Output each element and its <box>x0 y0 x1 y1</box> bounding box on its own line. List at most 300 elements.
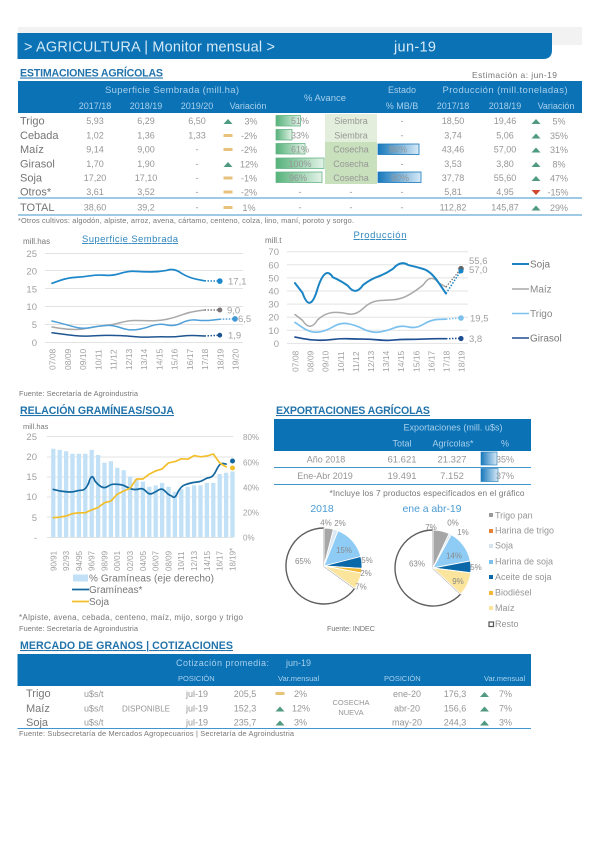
row: Maíz: - <box>196 144 198 154</box>
value labels: 3,8 <box>469 334 482 345</box>
table header: % Avance <box>304 93 346 104</box>
row: Soja: Soja <box>20 172 43 184</box>
row: Soja: - <box>196 173 198 183</box>
x axis labels: 18/19* <box>228 548 237 571</box>
x axis labels <box>50 548 237 571</box>
row: Otros: -2% <box>241 188 257 198</box>
right axis labels <box>243 433 259 542</box>
row: Soja: 244,3 <box>444 718 466 728</box>
table header: 2018/19 <box>489 101 521 111</box>
chart: superficie sembrada: mill.has <box>23 237 50 246</box>
value labels: 57,0 <box>469 265 488 276</box>
row: Trigo: 3% <box>244 116 258 126</box>
row: Maíz: 9,00 <box>137 144 155 154</box>
y axis labels: 60 <box>268 260 279 272</box>
x axis labels: 18/19 <box>215 348 225 370</box>
value labels: 1,9 <box>228 330 241 342</box>
row: Trigo: u$s/t <box>84 689 104 699</box>
x axis labels: 19/20 <box>230 348 240 370</box>
legend: producción <box>512 260 562 344</box>
x axis labels: 10/11 <box>93 349 103 370</box>
y axis labels: 20 <box>268 312 279 324</box>
heading: relación gramíneas/soja: RELACIÓN GRAMÍNEAS/SOJA <box>20 404 174 417</box>
right axis labels: 40% <box>243 484 259 492</box>
x axis labels: 04/05 <box>139 550 148 571</box>
pie chart: 2018: 5% <box>361 556 373 565</box>
x axis labels <box>290 350 466 372</box>
panel: estimaciones table <box>18 81 582 215</box>
legend: pies: Harina de trigo <box>495 526 554 536</box>
table header: % MB/B <box>386 101 418 111</box>
value labels <box>227 276 251 342</box>
row: TOTAL: 1% <box>242 203 256 213</box>
heading: exportaciones agrícolas: EXPORTACIONES AGRÍCOLAS <box>276 404 430 417</box>
heading: estimaciones agrícolas: ESTIMACIONES AGRÍCOLAS <box>20 66 163 80</box>
row: TOTAL: 29% <box>550 203 568 213</box>
row: Trigo: Siembra <box>334 116 368 126</box>
series: maíz <box>52 308 222 330</box>
value labels <box>469 256 488 345</box>
row: TOTAL: - <box>196 202 198 212</box>
row: Maíz: 43,46 <box>442 144 464 154</box>
row: Maíz: 9,14 <box>86 144 104 154</box>
table header: POSICIÓN <box>178 674 215 683</box>
pie chart: ene a abr-19: 14% <box>446 552 462 560</box>
right axis labels: 60% <box>243 458 259 468</box>
row: TOTAL: 38,60 <box>84 202 106 212</box>
x axis labels: 11/12 <box>108 349 118 370</box>
series: gramíneas <box>53 458 235 497</box>
row: TOTAL: 39,2 <box>137 202 155 212</box>
chart: relación gramíneas soja <box>23 422 259 608</box>
row: Otros: 5,81 <box>444 187 462 197</box>
row: TOTAL <box>20 202 568 214</box>
row: Girasol: 1,70 <box>86 159 104 169</box>
chart legend: Gramíneas* <box>89 585 142 596</box>
panel: exportaciones table: 37% <box>496 471 514 481</box>
value labels: 9,0 <box>227 306 240 316</box>
y axis labels: 20 <box>26 266 37 278</box>
row: Girasol: 3,80 <box>496 159 514 169</box>
row: Soja: Cosecha <box>333 173 369 183</box>
value labels: 19,5 <box>470 314 488 324</box>
row: Soja: u$s/t <box>84 718 104 728</box>
row: Girasol: 12% <box>240 160 258 170</box>
x axis labels: 17/18 <box>442 350 452 372</box>
x axis labels: 15/16 <box>411 350 421 372</box>
row: Maíz: 57,00 <box>494 144 516 154</box>
estimation date: Estimación a: jun-19 <box>472 70 557 80</box>
x axis labels: 12/13 <box>124 348 134 370</box>
chart title: Superficie Sembrada <box>82 234 179 245</box>
row: Girasol: 1,90 <box>137 159 155 169</box>
series: maíz <box>295 266 464 326</box>
series: girasol <box>52 333 222 338</box>
x axis labels: 09/10 <box>78 348 88 370</box>
panel: exportaciones table: 61.621 <box>387 454 417 466</box>
row: Maíz: 31% <box>550 145 568 155</box>
row: Otros: 3,61 <box>86 187 104 197</box>
x axis labels: 08/09 <box>306 350 316 372</box>
legend: producción: Girasol <box>530 334 562 344</box>
y axis labels <box>268 247 279 350</box>
x axis labels: 08/09 <box>164 550 173 571</box>
label: cosecha nueva: COSECHA <box>332 698 370 707</box>
source: mercado: Fuente: Subsecretaría de Mercados Agropecuarios | Secretaría de Agroindustria <box>19 729 295 738</box>
row: Soja: 96% <box>289 173 307 183</box>
row: Girasol: 100% <box>288 159 312 169</box>
x axis labels: 00/01 <box>113 550 122 571</box>
right axis labels: 20% <box>243 508 259 518</box>
source: indec: Fuente: INDEC <box>327 624 376 633</box>
footnote: otros cultivos: *Otros cultivos: algodón, alpiste, arroz, avena, cártamo, centeno, colza, lino, maní, poroto y sorgo. <box>18 216 354 225</box>
legend: pies: Trigo pan <box>495 510 533 520</box>
x axis labels: 98/99 <box>100 550 109 571</box>
row: Trigo: 205,5 <box>234 689 256 699</box>
row: Soja <box>20 172 568 184</box>
y axis labels: 5 <box>32 320 37 331</box>
title: pie 2018: 2018 <box>310 503 334 515</box>
row: Maíz: 86% <box>389 144 407 154</box>
row: Maíz: -2% <box>241 145 257 155</box>
heading: mercado de granos: MERCADO DE GRANOS | COTIZACIONES <box>20 640 233 652</box>
row: Soja: 47% <box>550 174 568 184</box>
table header: 2019/20 <box>181 101 213 111</box>
pie chart: ene a abr-19: 0% <box>447 518 459 528</box>
row: Maíz: Maíz <box>20 144 44 156</box>
left axis labels: 20 <box>26 452 37 463</box>
x axis labels: 02/03 <box>126 550 135 571</box>
x axis labels: 96/97 <box>88 550 97 571</box>
x axis labels: 07/08 <box>48 348 58 370</box>
title: pie ene a abr-19: ene a abr-19 <box>402 503 462 515</box>
row: Soja: -1% <box>241 174 257 184</box>
row: Trigo: 6,29 <box>137 116 155 126</box>
source: superficie: Fuente: Secretaría de Agroindustria <box>19 389 139 398</box>
label: cosecha nueva: NUEVA <box>338 708 364 717</box>
row: TOTAL: - <box>400 202 404 212</box>
y axis labels: 15 <box>26 284 37 296</box>
row: Cebada: 1,02 <box>86 130 104 140</box>
row: Cebada: Cebada <box>20 130 59 142</box>
series: soja <box>53 454 235 518</box>
left axis labels <box>26 432 37 544</box>
pie chart: ene a abr-19: 9% <box>452 577 464 586</box>
x axis labels: 14/15 <box>396 350 406 372</box>
estado bars <box>378 144 421 182</box>
y axis labels: 10 <box>26 302 37 313</box>
row: Maíz: Maíz <box>26 703 50 715</box>
row: Maíz: u$s/t <box>84 704 104 714</box>
pie chart: 2018: 2% <box>360 569 372 578</box>
chart: producción <box>265 230 488 372</box>
x axis labels: 12/13 <box>366 350 376 372</box>
panel: exportaciones table: % <box>501 438 509 448</box>
x axis labels: 18/19 <box>456 350 466 372</box>
row: Soja: 235,7 <box>234 718 256 728</box>
pie chart: ene a abr-19: 63% <box>409 560 425 568</box>
table header: Cotización promedia: <box>176 658 269 668</box>
row: Cebada: 35% <box>550 131 568 141</box>
row: Soja: 55,60 <box>494 173 516 183</box>
header banner <box>18 27 582 59</box>
row: Cebada: - <box>400 130 404 140</box>
row: TOTAL: 145,87 <box>491 202 519 212</box>
table header: Superficie Sembrada (mill.ha) <box>105 85 239 96</box>
row: Soja: 17,10 <box>135 173 157 183</box>
legend: producción: Soja <box>530 260 550 270</box>
table header: Variación <box>230 101 266 111</box>
row: Maíz: 152,3 <box>234 704 256 714</box>
row: Maíz: 12% <box>292 704 310 714</box>
series: trigo <box>52 316 238 330</box>
legend: pies: Resto <box>495 619 519 629</box>
row: Trigo <box>20 116 566 128</box>
chart title: Producción <box>354 230 406 241</box>
chart: superficie sembrada <box>23 234 251 370</box>
table header: Variación <box>538 101 574 111</box>
row: TOTAL: 112,82 <box>440 202 466 212</box>
table header: Producción (mill.toneladas) <box>442 85 568 96</box>
row: TOTAL: - <box>298 202 302 212</box>
x axis labels: 14/15 <box>203 550 212 571</box>
pie chart: 2018: 4% <box>320 518 332 528</box>
x axis labels: 94/95 <box>75 550 84 571</box>
table header: 2017/18 <box>437 101 469 111</box>
pie chart: 2018: 65% <box>295 557 311 566</box>
row: Cebada: -2% <box>241 131 257 141</box>
table header <box>18 81 582 113</box>
row: Soja: 3% <box>499 718 512 728</box>
pie chart: 2018 <box>286 518 373 604</box>
row: Girasol: - <box>400 159 404 169</box>
table header: Estado <box>388 85 416 95</box>
row: Cebada: 1,33 <box>188 130 206 140</box>
row: Soja <box>26 717 512 729</box>
row: Girasol: - <box>196 159 198 169</box>
table header: Var.mensual <box>278 674 319 683</box>
row: Otros: - <box>298 187 302 197</box>
right axis labels: 80% <box>243 433 259 442</box>
y axis labels: 40 <box>268 286 279 298</box>
right axis labels: 0% <box>243 534 255 542</box>
avance bars <box>276 116 324 182</box>
row: Otros: - <box>196 187 198 197</box>
row: Girasol: 3,53 <box>444 159 462 169</box>
panel: exportaciones table: 35% <box>496 454 514 464</box>
row: Soja: Soja <box>26 717 49 729</box>
panel: exportaciones table: 19.491 <box>387 471 417 482</box>
row: Cebada: 33% <box>291 130 309 140</box>
panel: exportaciones table <box>274 419 531 484</box>
chart legend: Soja <box>89 597 109 608</box>
table header: Var.mensual <box>484 674 525 683</box>
row: Maíz: 156,6 <box>444 704 466 714</box>
table header: POSICIÓN <box>384 674 421 683</box>
row: Girasol: 8% <box>552 160 566 170</box>
table header <box>18 654 531 686</box>
x axis labels: 90/91 <box>50 550 58 571</box>
left axis labels: 10 <box>26 492 37 503</box>
label: cosecha nueva <box>332 698 370 717</box>
chart: relación gramíneas soja: mill.has <box>23 422 49 431</box>
row: Trigo: 176,3 <box>444 689 466 699</box>
x axis labels: 16/17 <box>216 550 225 571</box>
panel: exportaciones table: Ene-Abr 2019 <box>297 471 353 481</box>
row: Trigo: 7% <box>499 689 512 699</box>
legend: producción: Maíz <box>530 284 552 296</box>
footnote: gramíneas: *Alpiste, avena, cebada, centeno, maíz, mijo, sorgo y trigo <box>19 613 244 622</box>
row: Otros: - <box>350 187 352 197</box>
table header: 2017/18 <box>79 101 111 111</box>
x axis labels: 17/18 <box>200 348 210 370</box>
panel: exportaciones table: Agrícolas* <box>432 438 474 448</box>
legend: producción: Trigo <box>530 309 553 320</box>
x axis labels: 12/13 <box>190 550 199 571</box>
left axis labels: - <box>34 533 37 544</box>
row: Soja: 3% <box>294 718 307 728</box>
pie chart: 2018: 2% <box>334 519 346 528</box>
row: Otros <box>20 186 569 198</box>
estado backgrounds <box>325 114 377 184</box>
row: Otros: -15% <box>547 188 569 198</box>
chart: producción: mill.t <box>265 236 282 245</box>
left axis labels: 25 <box>26 432 37 443</box>
header banner: jun-19 <box>393 40 436 56</box>
y axis labels: 30 <box>268 300 279 310</box>
x axis labels: 09/10 <box>321 350 331 372</box>
y axis labels: 0 <box>32 338 37 349</box>
y axis labels: 50 <box>268 274 279 284</box>
note: exportaciones: *Incluye los 7 productos especificados en el gráfico <box>330 488 525 498</box>
row: Maíz: Cosecha <box>333 144 369 154</box>
chart legend <box>72 574 214 608</box>
header banner: > AGRICULTURA | Monitor mensual > <box>24 40 275 56</box>
row: Girasol <box>20 158 566 170</box>
row: Trigo: Trigo <box>20 116 45 128</box>
row: Trigo: 18,50 <box>442 116 464 126</box>
panel: exportaciones table: Exportaciones (mill. u$s) <box>404 422 502 432</box>
row: Trigo: 51% <box>291 116 309 126</box>
row: Trigo: 2% <box>294 689 307 699</box>
y axis labels <box>26 249 37 349</box>
panel: exportaciones table: Año 2018 <box>307 454 345 464</box>
x axis labels: 07/08 <box>290 350 300 372</box>
row: Otros: 3,52 <box>137 187 155 197</box>
left axis labels: 15 <box>26 472 37 483</box>
value labels: 6,5 <box>238 314 251 325</box>
x axis labels: 13/14 <box>381 350 391 372</box>
x axis labels: 15/16 <box>170 348 180 370</box>
row: Soja: 17,20 <box>84 173 106 183</box>
x axis labels: 92/93 <box>62 550 71 571</box>
row: Cebada: Siembra <box>334 130 368 140</box>
x axis labels: 10/11 <box>336 351 346 372</box>
row: Otros: - <box>400 187 404 197</box>
row: Maíz: DISPONIBLE <box>122 704 170 714</box>
series: soja <box>295 263 464 303</box>
table header: jun-19 <box>285 658 311 668</box>
row: Soja: 37,78 <box>442 173 464 183</box>
legend: pies <box>489 510 554 629</box>
row: Trigo: 19,46 <box>494 116 516 126</box>
row: Soja: may-20 <box>392 718 422 728</box>
legend: pies: Biodiésel <box>495 588 532 598</box>
series: girasol <box>295 336 464 341</box>
pie chart: ene a abr-19: 1% <box>457 528 469 537</box>
row: TOTAL: - <box>350 202 352 212</box>
y axis labels: 10 <box>268 326 279 337</box>
panel: exportaciones table: 21.327 <box>437 454 467 466</box>
x axis labels: 16/17 <box>185 348 195 370</box>
row: Maíz <box>20 144 568 156</box>
pie chart: 2018: 15% <box>336 546 352 555</box>
left axis labels: 5 <box>32 513 37 524</box>
bars: % gramíneas <box>53 449 232 537</box>
table header: 2018/19 <box>130 101 162 111</box>
row: Cebada: 3,74 <box>444 130 462 140</box>
pie chart: ene a abr-19 <box>395 518 482 606</box>
y axis labels: 0 <box>274 339 279 350</box>
series: trigo <box>295 315 464 332</box>
row: Trigo: 5,93 <box>86 116 104 126</box>
legend: pies: Aceite de soja <box>495 572 552 582</box>
row: Maíz: 61% <box>291 144 309 154</box>
row: Trigo: 6,50 <box>188 116 206 126</box>
row: Cebada: 1,36 <box>137 130 155 140</box>
row: Maíz: abr-20 <box>394 704 420 714</box>
row: Girasol: Girasol <box>20 158 55 170</box>
x axis labels: 13/14 <box>139 348 149 370</box>
row: Trigo: jul-19 <box>185 689 208 699</box>
legend: pies: Maíz <box>495 603 515 613</box>
row: Girasol: Cosecha <box>333 159 369 169</box>
row: Maíz: 7% <box>499 704 512 714</box>
row: Soja: 90% <box>391 173 409 183</box>
source: gramíneas: Fuente: Secretaría de Agroindustria <box>19 624 139 633</box>
panel: cotizaciones table <box>18 654 531 729</box>
y axis labels: 25 <box>26 249 37 260</box>
x axis labels: 16/17 <box>426 350 436 372</box>
value labels: 17,1 <box>228 276 246 288</box>
panel: exportaciones table: Total <box>392 438 412 448</box>
row: Maíz: jul-19 <box>185 704 208 714</box>
legend: pies: Soja <box>495 540 513 550</box>
row: Trigo: ene-20 <box>393 689 421 699</box>
row: Soja: jul-19 <box>185 718 208 728</box>
x axis labels: 10/11 <box>177 551 186 571</box>
row: Otros: 4,95 <box>496 187 514 197</box>
row: Trigo: 5% <box>552 116 566 126</box>
series: soja <box>52 269 223 284</box>
y axis labels: 70 <box>268 247 279 258</box>
value labels: 55,6 <box>469 256 488 267</box>
row: Cebada: 5,06 <box>496 130 514 140</box>
row: Cebada <box>20 130 568 142</box>
chart legend: % Gramíneas (eje derecho) <box>89 574 214 584</box>
x axis labels: 08/09 <box>63 348 73 370</box>
row: Trigo: - <box>400 116 404 126</box>
row: TOTAL: TOTAL <box>20 202 54 214</box>
pie chart: 2018: 7% <box>355 582 367 592</box>
legend: pies: Harina de soja <box>495 556 553 566</box>
row: Maíz <box>26 703 512 715</box>
x axis labels: 06/07 <box>152 550 161 571</box>
x axis labels: 14/15 <box>154 348 164 370</box>
row: Otros: Otros* <box>20 186 52 198</box>
panel: exportaciones table: 7.152 <box>440 471 464 482</box>
x axis labels <box>48 348 240 370</box>
